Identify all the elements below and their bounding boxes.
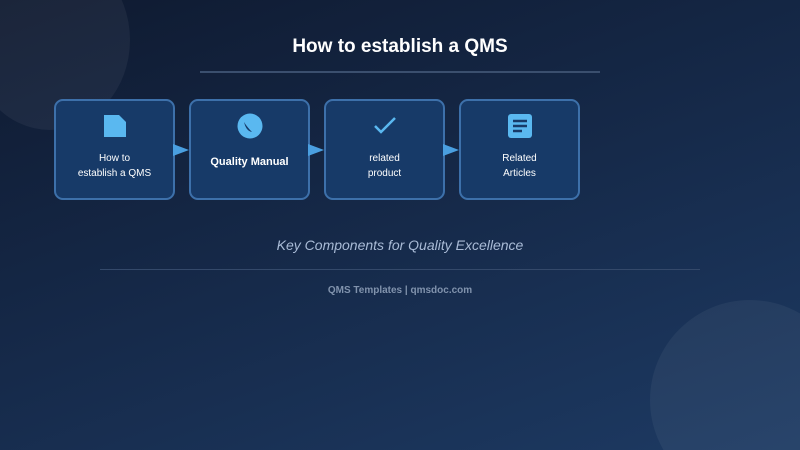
arrow 1 [173,144,189,156]
arrow 2 [308,144,324,156]
icon: globe [238,114,262,138]
box: how to [54,99,175,200]
icon: article [508,114,532,138]
box: related product: related [369,153,400,164]
box: related product: product [368,168,401,179]
box: how to: establish a QMS [78,168,151,179]
box: related articles [459,99,580,200]
title: How to establish a QMS [292,36,508,57]
box: related articles: Related [502,153,537,164]
box: how to: How to [99,153,130,164]
subtitle: Key Components for Quality Excellence [277,237,523,253]
box: related articles: Articles [503,168,536,179]
footer: QMS Templates | qmsdoc.com [328,285,472,296]
arrow 3 [443,144,459,156]
box: related product [324,99,445,200]
box: quality manual [189,99,310,200]
box: quality manual: Quality Manual [210,156,289,168]
icon: check [374,117,396,134]
icon: document [104,115,126,137]
